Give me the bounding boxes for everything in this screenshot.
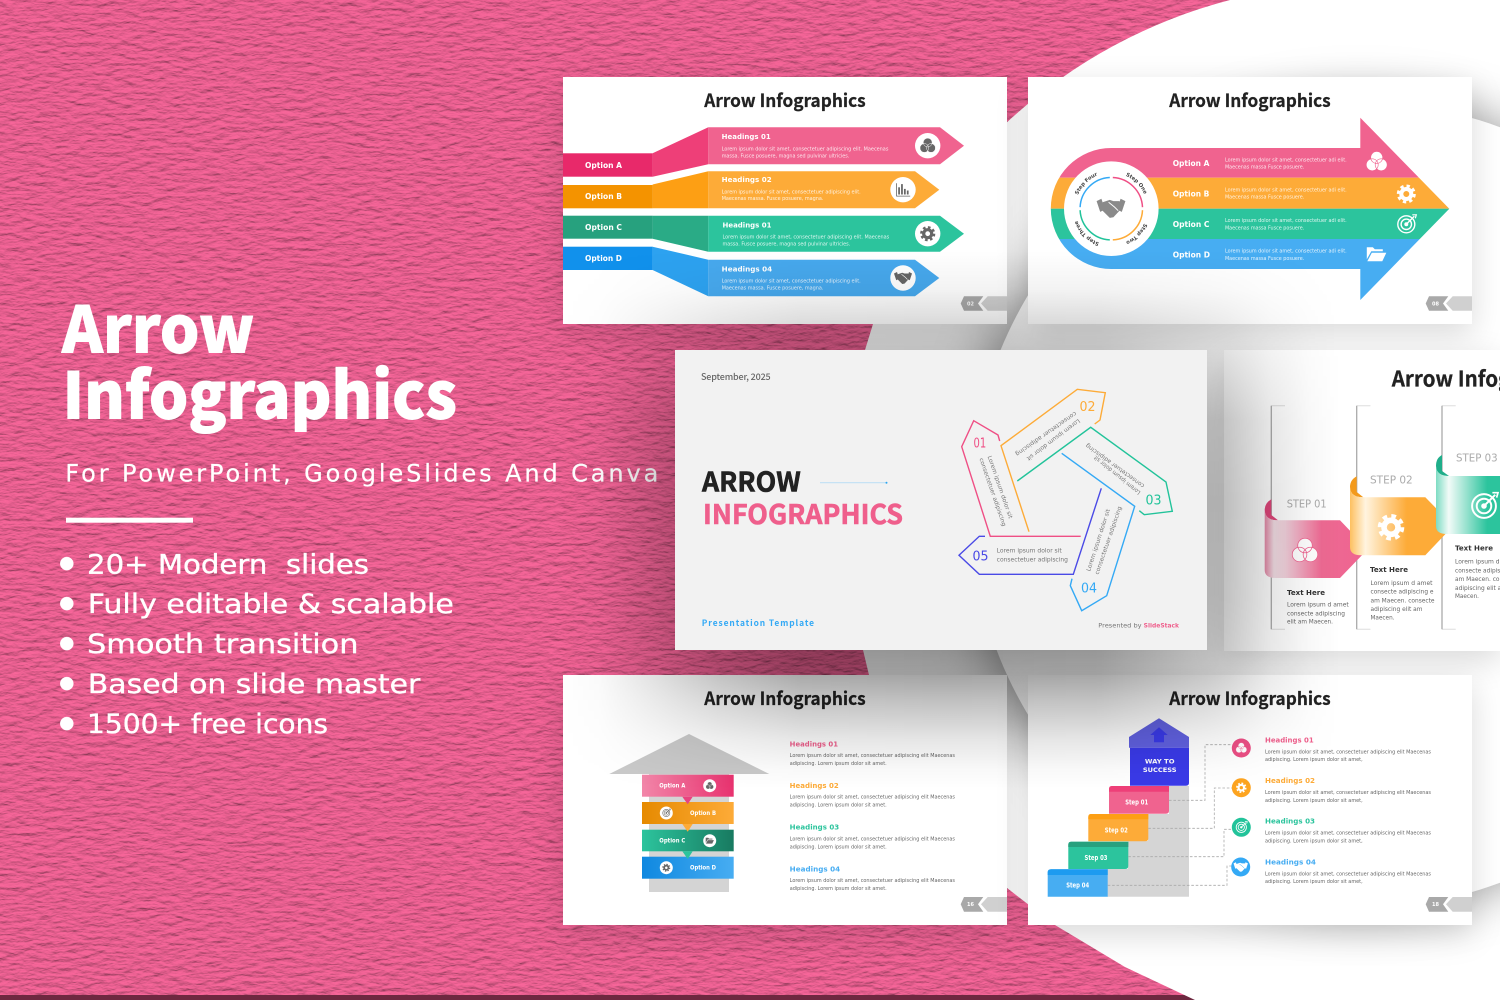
grey staircase backing (1107, 786, 1189, 897)
arrow C: Lorem ipsum dolor sit amet, consectetuer adipiscing elit. Maecenas (722, 234, 890, 240)
slide title: Arrow Infographics (1168, 685, 1331, 711)
slide title: Arrow Infographics (703, 87, 866, 113)
steps: Step 01 (1125, 799, 1149, 807)
arrow D: Maecenas massa. Fusce posuere, magna. (722, 286, 824, 292)
five-arrow cycle diagram: 03 (1146, 493, 1162, 508)
step 01 text (1287, 588, 1349, 626)
step 03 ribbon (1436, 451, 1500, 534)
panel: slide 2 big arrow with circle (1028, 77, 1472, 324)
arrow B: Maecenas massa. Fusce posuere, magna. (722, 196, 824, 202)
heading texts (790, 740, 955, 892)
page tab (1426, 897, 1472, 912)
step 01 text: consecte adipiscing (1287, 611, 1345, 617)
option rows: Option B (690, 811, 717, 817)
heading texts: Headings 04 (790, 865, 841, 873)
arrow C: massa. Fusce posuere, magna sed pulvinar ultricies. (722, 242, 851, 248)
panel: slide 4 step ribbons (1224, 350, 1500, 651)
step 02 text: consecte adipiscing e (1370, 590, 1434, 596)
house arrow: way to success (1129, 718, 1189, 786)
option rows: Option C (659, 838, 685, 844)
heading texts: Headings 02 (790, 782, 839, 790)
house arrow: way to success: WAY TO (1145, 758, 1175, 766)
five-arrow cycle diagram: Lorem ipsum dolor sit (997, 548, 1062, 554)
heading: Arrow Infographics: Infographics (62, 345, 457, 437)
arrow A: Option A (585, 161, 623, 170)
feature list: 1500+ free icons (87, 709, 328, 740)
feature list: 20+ Modern slides (87, 549, 369, 580)
arrow D: Headings 04 (722, 266, 773, 274)
heading texts: Headings 03 (790, 824, 840, 832)
five-arrow cycle diagram: Lorem ipsum dolor sit (1093, 453, 1142, 495)
step 01 text: Text Here (1287, 588, 1325, 597)
arrow C: Option C (585, 223, 622, 232)
heading 02 with icon (1232, 777, 1431, 804)
circular steps (1064, 161, 1159, 256)
arrow B: Option B (585, 192, 622, 201)
step 03 text: Text Here (1455, 543, 1493, 552)
arrow B: Lorem ipsum dolor sit amet, consectetuer adipiscing elit. (722, 189, 861, 195)
heading texts: Headings 01 (790, 740, 838, 748)
heading 03 with icon (1232, 818, 1431, 844)
heading 03 with icon: adipiscing. Lorem ipsum dolor sit amet, (1265, 838, 1363, 844)
step 02 ribbon: STEP 02 (1370, 474, 1413, 487)
option rows: Option B (1173, 190, 1209, 199)
panel: slide 5 house arrow (563, 675, 1007, 925)
five-arrow cycle diagram: Lorem ipsum dolor sit (1025, 417, 1081, 461)
heading 04 with icon (1231, 858, 1431, 885)
option rows: Lorem ipsum dolor sit amet, consectetuer adi elit. (1225, 249, 1347, 255)
icons on arrow (1366, 151, 1416, 261)
heading 04 with icon: Lorem ipsum dolor sit amet, consectetuer adipiscing elit Maecenas (1265, 871, 1431, 877)
panel: slide 6 stairs to success (1028, 675, 1472, 925)
option rows (1173, 157, 1347, 262)
subtitle: For PowerPoint, GoogleSlides And Canva (65, 460, 658, 488)
cover title: ARROW (701, 461, 801, 500)
presented by (1098, 624, 1179, 630)
circular steps: Step Three (1075, 221, 1099, 246)
five-arrow cycle diagram: 04 (1081, 581, 1097, 596)
presented by: SlideStack (1144, 624, 1179, 630)
heading: Arrow Infographics (61, 280, 457, 437)
option rows: Maecenas massa Fusce posuere. (1225, 256, 1305, 262)
grey arrow behind rows (609, 734, 769, 892)
arrow D (563, 247, 939, 296)
feature list (60, 549, 454, 740)
heading 02 with icon: Lorem ipsum dolor sit amet, consectetuer adipiscing elit Maecenas (1265, 790, 1431, 796)
option rows: Option A (659, 783, 686, 789)
step 01 ribbon: STEP 01 (1287, 497, 1327, 510)
heading texts: adipiscing. Lorem ipsum dolor sit amet. (790, 803, 887, 809)
steps: Step 03 (1084, 854, 1108, 862)
step column lines (1271, 406, 1456, 629)
step 02 text: Maecen. (1370, 615, 1395, 621)
circular steps: Step One (1126, 172, 1146, 194)
circular steps: Step Two (1126, 224, 1148, 244)
heading 01 with icon: adipiscing. Lorem ipsum dolor sit amet, (1265, 757, 1363, 763)
step 02 text: adipiscing elit am (1370, 607, 1423, 613)
step 03 text: Maecen. (1455, 594, 1479, 600)
arrow D: Lorem ipsum dolor sit amet, consectetuer adipiscing elit. (722, 279, 861, 285)
step 02 ribbon (1350, 474, 1453, 555)
page tab: 02 (967, 301, 974, 307)
arrow A: massa. Fusce posuere, magna sed pulvinar ultricies. (722, 153, 850, 159)
steps (1048, 786, 1169, 897)
slide title: Arrow Infographics (703, 685, 866, 711)
step 01 text: Lorem ipsum d amet (1287, 603, 1349, 609)
slide title: Arrow Infographics (1168, 87, 1331, 113)
house arrow: way to success: SUCCESS (1143, 766, 1177, 774)
arrow D: Option D (585, 254, 622, 263)
heading 02 with icon: adipiscing. Lorem ipsum dolor sit amet, (1265, 798, 1363, 804)
option rows: Maecenas massa Fusce posuere. (1225, 195, 1305, 201)
page tab (961, 897, 1007, 912)
heading 01 with icon: Headings 01 (1265, 736, 1314, 744)
arrow A: Lorem ipsum dolor sit amet, consectetuer adipiscing elit. Maecenas (722, 146, 889, 152)
option rows: Option D (690, 865, 716, 871)
heading texts: adipiscing. Lorem ipsum dolor sit amet. (790, 761, 887, 767)
date: September, 2025 (701, 370, 771, 383)
option rows (642, 775, 734, 879)
heading 03 with icon: Headings 03 (1265, 818, 1315, 826)
five-arrow cycle diagram: consectetuer adipiscing (1095, 505, 1124, 576)
big arrow bands (1050, 118, 1450, 300)
option rows: Option A (1173, 159, 1210, 168)
option rows: Option C (1173, 220, 1210, 229)
heading 04 with icon: adipiscing. Lorem ipsum dolor sit amet, (1265, 879, 1363, 885)
cover title: INFOGRAPHICS (703, 493, 903, 532)
circular steps: Step Four (1074, 172, 1097, 194)
option rows: Maecenas massa Fusce posuere. (1225, 164, 1305, 170)
step 02 text (1370, 565, 1435, 621)
dashed connectors (1108, 745, 1232, 885)
feature list: Smooth transition (87, 629, 358, 660)
step 02 text: Text Here (1370, 565, 1408, 574)
arrow B (563, 171, 939, 208)
page tab: 18 (1432, 902, 1439, 908)
steps: Step 02 (1105, 826, 1128, 834)
heading 01 with icon: Lorem ipsum dolor sit amet, consectetuer adipiscing elit Maecenas (1265, 749, 1431, 755)
heading texts: Lorem ipsum dolor sit amet, consectetuer adipiscing elit Maecenas (790, 836, 955, 842)
five-arrow cycle diagram: consectetuer adipiscing (1014, 410, 1077, 457)
feature list: Fully editable & scalable (88, 589, 454, 620)
panel: slide 1 stacked arrows (563, 77, 1007, 324)
page tab (1426, 296, 1472, 311)
heading 04 with icon: Headings 04 (1265, 859, 1316, 867)
presented by: Presented by (1098, 624, 1142, 630)
heading: Arrow Infographics: Arrow (61, 280, 254, 372)
five-arrow cycle diagram: Lorem ipsum dolor sit (1086, 508, 1112, 572)
feature list: Based on slide master (88, 669, 420, 700)
accent line (820, 482, 888, 484)
arrow A: Headings 01 (722, 133, 771, 141)
option rows: Lorem ipsum dolor sit amet, consectetuer adi elit. (1225, 157, 1347, 163)
presentation label: Presentation Template (702, 617, 814, 629)
five-arrow cycle diagram: consectetuer adipiscing (977, 458, 1007, 528)
panel: centre cover slide (675, 350, 1207, 650)
five-arrow cycle diagram: 05 (972, 549, 988, 564)
option rows: Lorem ipsum dolor sit amet, consectetuer adi elit. (1225, 188, 1347, 194)
five-arrow cycle diagram: Lorem ipsum dolor sit (986, 455, 1013, 520)
option rows: Lorem ipsum dolor sit amet, consectetuer adi elit. (1225, 218, 1347, 224)
five-arrow cycle diagram: consectetuer adipiscing (1085, 442, 1146, 488)
cover title (701, 461, 903, 532)
heading 01 with icon (1232, 736, 1431, 763)
page tab: 16 (967, 902, 974, 908)
heading texts: Lorem ipsum dolor sit amet, consectetuer adipiscing elit Maecenas (790, 753, 955, 759)
step 03 text (1455, 543, 1500, 600)
step 02 text: am Maecen. consecte (1370, 598, 1435, 604)
option rows: Option D (1173, 250, 1210, 259)
step 01 text: elit am Maecen. (1287, 620, 1333, 626)
five-arrow cycle diagram (959, 389, 1172, 611)
step 01 ribbon (1265, 497, 1368, 578)
heading texts: Lorem ipsum dolor sit amet, consectetuer adipiscing elit Maecenas (790, 795, 955, 801)
arrow C (563, 216, 964, 252)
page tab (961, 296, 1007, 311)
heading 03 with icon: Lorem ipsum dolor sit amet, consectetuer adipiscing elit Maecenas (1265, 831, 1431, 837)
five-arrow cycle diagram: consectetuer adipiscing (997, 557, 1068, 563)
arrow A (563, 127, 964, 177)
heading texts: adipiscing. Lorem ipsum dolor sit amet. (790, 844, 887, 850)
five-arrow cycle diagram: 01 (974, 436, 986, 451)
heading texts: adipiscing. Lorem ipsum dolor sit amet. (790, 886, 887, 892)
step 03 ribbon: STEP 03 (1456, 451, 1498, 464)
page tab: 08 (1432, 301, 1439, 307)
heading texts: Lorem ipsum dolor sit amet, consectetuer adipiscing elit Maecenas (790, 878, 955, 884)
heading 02 with icon: Headings 02 (1265, 777, 1315, 785)
steps: Step 04 (1066, 882, 1090, 890)
option rows: Maecenas massa Fusce posuere. (1225, 225, 1305, 231)
five-arrow cycle diagram: 02 (1080, 400, 1096, 415)
arrow B: Headings 02 (722, 176, 772, 184)
arrow C: Headings 01 (722, 221, 772, 229)
step 02 text: Lorem ipsum d amet (1370, 581, 1433, 587)
